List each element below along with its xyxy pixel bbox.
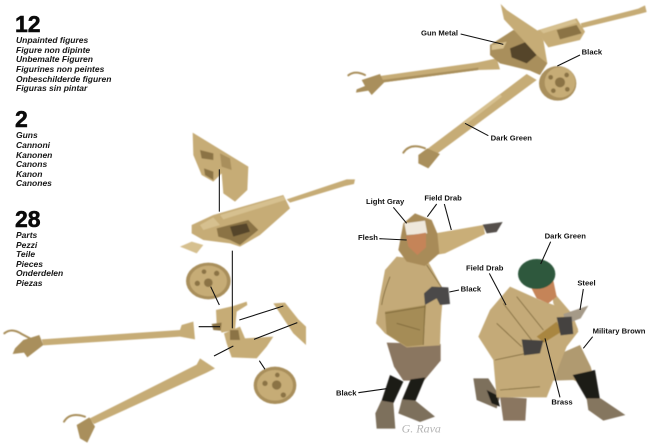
parts artwork: [4, 133, 355, 443]
callout: Flesh: [358, 233, 407, 242]
callout: Steel: [577, 279, 596, 310]
callout: Black (boots): [336, 389, 387, 398]
callout: Black (binoculars): [449, 285, 482, 294]
assembled gun with paint callouts: [348, 4, 647, 168]
exploded gun parts: [4, 133, 355, 443]
pointing soldier: [375, 213, 503, 429]
artist signature: G. Rava: [402, 422, 441, 436]
stat: 12 unpainted figures: Figuras sin pintar: [16, 83, 88, 93]
stat: 2 guns: Canons: [16, 159, 47, 169]
callout: Field Drab (pointing soldier): Field Drab: [424, 194, 462, 203]
kneeling soldier: [473, 259, 625, 421]
callout: Black: [557, 48, 603, 66]
callout: Military Brown: [583, 326, 646, 348]
wheel: [539, 66, 576, 101]
callout: Black (binoculars): Black: [461, 285, 482, 294]
gun barrel: [581, 5, 647, 28]
callout: Black (boots): Black: [336, 389, 357, 398]
callout: Dark Green (helmet): Dark Green: [545, 232, 586, 241]
callout: Brass: [545, 338, 573, 406]
callout: Field Drab (pointing soldier): [424, 194, 462, 230]
callout: Military Brown: Military Brown: [593, 326, 646, 335]
callout: Dark Green: Dark Green: [491, 134, 532, 143]
gun body: [490, 30, 547, 75]
stat: 28 parts: Teile: [16, 249, 35, 259]
callout: Steel: Steel: [577, 279, 596, 288]
callout: Light Gray: [366, 197, 407, 223]
callout: Field Drab (kneeling soldier): [466, 264, 506, 305]
stat: 2 guns: Cannoni: [16, 140, 51, 150]
callout: Dark Green (helmet): [541, 232, 586, 264]
callout: Field Drab (kneeling soldier): Field Drab: [466, 264, 504, 273]
gun artwork: [348, 4, 647, 168]
stat: 2 guns: Kanon: [16, 169, 42, 179]
callout: Light Gray: Light Gray: [366, 197, 405, 206]
stat: 28 parts: Pieces: [16, 259, 43, 269]
stat: 2 guns: [15, 106, 52, 188]
callout: Brass: Brass: [551, 397, 573, 406]
stat: 28 parts: [15, 206, 63, 288]
stat: 12 unpainted figures: Figurines non peintes: [16, 64, 105, 74]
gun barrel and cradle: [180, 179, 355, 253]
stat: 12 unpainted figures: Unbemalte Figuren: [16, 54, 93, 64]
stat: 12 unpainted figures: 12: [15, 11, 41, 37]
callout: Flesh: Flesh: [358, 233, 378, 242]
stat: 2 guns: Canones: [16, 178, 52, 188]
shield part: [193, 133, 248, 202]
stat: 28 parts: Onderdelen: [16, 268, 63, 278]
lower wheel: [254, 367, 296, 404]
gun shield: [501, 4, 547, 63]
callout: Black: Black: [582, 48, 603, 57]
stat: 2 guns: Kanonen: [16, 150, 52, 160]
stat: 2 guns: Guns: [16, 130, 38, 140]
stat: 2 guns: 2: [15, 106, 28, 132]
side plates: [273, 303, 306, 345]
stat: 28 parts: Pezzi: [16, 240, 38, 250]
assembly lines: [199, 169, 297, 369]
callout: Gun Metal: Gun Metal: [421, 28, 458, 37]
upper wheel: [186, 263, 231, 299]
stat: 12 unpainted figures: Onbeschilderde figuren: [16, 74, 111, 84]
painted figures with callouts: [336, 194, 646, 436]
stat: 12 unpainted figures: Figure non dipinte: [16, 45, 90, 55]
callout: Gun Metal: [421, 28, 503, 44]
upper trail part: [4, 322, 195, 357]
stat: 28 parts: Parts: [16, 230, 38, 240]
stat: 28 parts: Piezas: [16, 278, 43, 288]
lower trail: [403, 74, 537, 168]
stat: 12 unpainted figures: Unpainted figures: [16, 35, 89, 45]
lower trail part: [64, 358, 215, 443]
upper trail: [348, 58, 500, 95]
text block: contents counts: [15, 11, 111, 288]
stat: 28 parts: 28: [15, 206, 41, 232]
gun cradle: [537, 18, 585, 47]
axle and bracket parts: [212, 302, 273, 358]
callout: Dark Green: [465, 123, 532, 143]
stat: 12 unpainted figures: [15, 11, 111, 93]
